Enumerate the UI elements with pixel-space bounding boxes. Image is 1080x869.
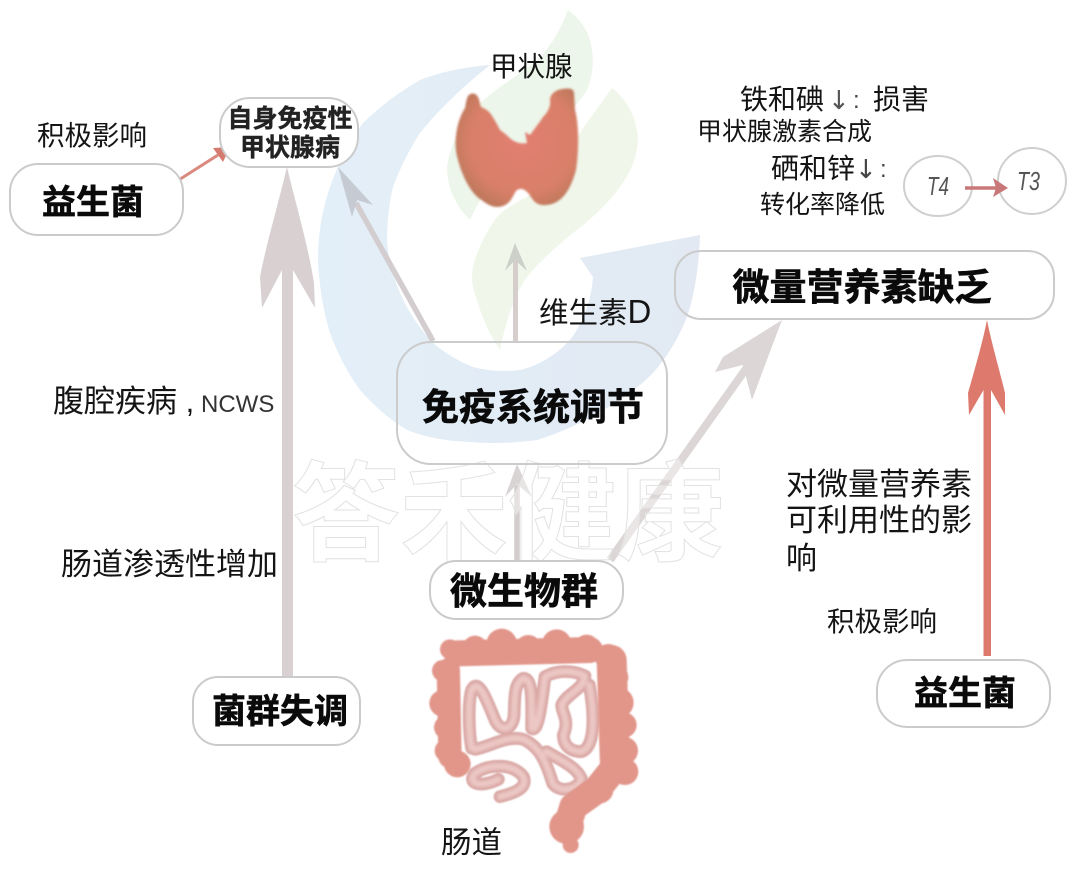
box: probiotics right xyxy=(877,660,1050,727)
box: micronutrient deficiency xyxy=(675,251,1054,319)
arrow: immune regulation to autoimmune thyroid disease xyxy=(338,167,433,341)
box: microbiota: 微生物群 xyxy=(450,571,598,612)
arrow: dysbiosis to autoimmune thyroid disease xyxy=(260,167,315,678)
text: iron and iodine impair thyroid hormone synthesis: 铁和碘 xyxy=(740,84,824,115)
circle: T4: T4 xyxy=(927,171,949,201)
text: iron and iodine impair thyroid hormone synthesis: 甲状腺激素合成 xyxy=(697,118,872,146)
arrow: microbiota to immune regulation xyxy=(505,464,532,560)
box: autoimmune thyroid disease xyxy=(220,98,358,167)
label: 甲状腺: 甲状腺 xyxy=(490,51,572,82)
icon: intestines xyxy=(429,629,638,853)
box: dysbiosis xyxy=(193,677,360,745)
text: selenium and zinc lower conversion rate xyxy=(760,153,887,219)
text: selenium and zinc lower conversion rate: 硒和锌 xyxy=(771,153,855,184)
text: iron and iodine impair thyroid hormone synthesis: ↓ xyxy=(828,86,850,116)
text: effect on micronutrient availability: 对微量营养素 xyxy=(786,467,972,502)
box: autoimmune thyroid disease: 甲状腺病 xyxy=(240,134,340,162)
label: positive effect right: 积极影响 xyxy=(827,606,937,637)
box: immune regulation xyxy=(397,342,667,464)
label: celiac disease and NCWS: NCWS xyxy=(201,391,274,418)
arrow: immune regulation to thyroid via vitamin D xyxy=(505,243,527,342)
text: iron and iodine impair thyroid hormone synthesis: : xyxy=(853,87,860,114)
box: probiotics right: 益生菌 xyxy=(914,675,1016,713)
watermark: 答禾健康: 答禾健康 xyxy=(292,454,724,575)
icon: thyroid gland xyxy=(456,88,578,207)
box: probiotics left: 益生菌 xyxy=(42,184,144,222)
circle: T3 xyxy=(998,148,1066,214)
box: micronutrient deficiency: 微量营养素缺乏 xyxy=(732,267,992,308)
text: effect on micronutrient availability xyxy=(786,467,972,576)
box: autoimmune thyroid disease: 自身免疫性 xyxy=(227,105,353,133)
label: vitamin D: 维生素D xyxy=(539,293,651,330)
arrow: probiotics to autoimmune thyroid disease xyxy=(174,147,230,183)
label: positive effect left: 积极影响 xyxy=(37,120,147,151)
label: increased intestinal permeability: 肠道渗透性增加 xyxy=(61,547,278,582)
small intestine xyxy=(469,672,593,797)
text: iron and iodine impair thyroid hormone synthesis: 损害 xyxy=(873,84,929,115)
arrow: probiotics to micronutrient availability xyxy=(968,320,1005,656)
label: 肠道: 肠道 xyxy=(441,826,502,860)
text: effect on micronutrient availability: 响 xyxy=(786,541,817,576)
background logo: blue crescent and green flame xyxy=(318,10,700,443)
box: immune regulation: 免疫系统调节 xyxy=(422,387,644,428)
text: selenium and zinc lower conversion rate: : xyxy=(880,156,887,183)
text: selenium and zinc lower conversion rate: 转化率降低 xyxy=(760,191,885,219)
large intestine xyxy=(429,629,638,853)
box: probiotics left xyxy=(10,164,183,235)
text: iron and iodine impair thyroid hormone synthesis xyxy=(697,84,929,146)
circle: T4 xyxy=(904,156,972,216)
text: effect on micronutrient availability: 可利用性的影 xyxy=(786,503,972,538)
arrow: microbiota to micronutrient deficiency xyxy=(610,320,782,560)
arrow: T4 to T3 xyxy=(965,178,1008,197)
text: selenium and zinc lower conversion rate: ↓ xyxy=(855,155,877,185)
label: celiac disease and NCWS: 腹腔疾病 , xyxy=(53,384,194,419)
label: celiac disease and NCWS xyxy=(53,384,274,419)
box: dysbiosis: 菌群失调 xyxy=(212,693,348,731)
box: microbiota xyxy=(430,561,623,619)
circle: T3: T3 xyxy=(1017,166,1040,196)
